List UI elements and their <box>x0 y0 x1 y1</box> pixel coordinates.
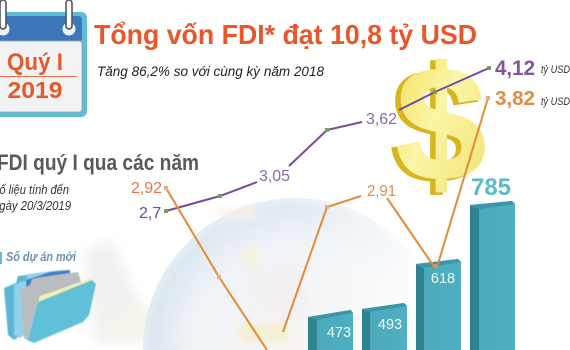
calendar text: year: 2019 <box>8 77 62 103</box>
purple label 3,62: 3,62 <box>366 111 397 128</box>
bar 618: 618 <box>431 271 455 287</box>
section heading: FDI quý I qua các năm <box>0 150 199 175</box>
calendar text: quarter: Quý I <box>7 49 63 76</box>
data note <box>0 182 71 213</box>
purple label 2,7: 2,7 <box>139 205 161 222</box>
bar 785 <box>470 174 515 350</box>
orange label 2,91: 2,91 <box>367 183 396 200</box>
bar 785: 785 <box>471 174 511 201</box>
orange label 3,82: 3,82 <box>495 88 535 110</box>
line chart: purple series <box>139 57 570 222</box>
blurred banknote background <box>85 240 160 342</box>
purple label 3,05: 3,05 <box>259 168 290 185</box>
bar 493: 493 <box>378 317 402 333</box>
bar 473 <box>308 310 353 350</box>
icon: dollar sign: $ <box>392 36 480 215</box>
icon: folders <box>4 270 96 343</box>
title: Tổng vốn FDI* đạt 10,8 tỷ USD <box>94 19 477 50</box>
bar 473: 473 <box>327 325 351 341</box>
purple label 4,12: 4,12 <box>495 57 535 80</box>
bar 618 <box>416 259 461 350</box>
bar 493 <box>362 303 407 350</box>
line chart: orange series <box>131 88 570 350</box>
orange label 2,92: 2,92 <box>131 180 162 197</box>
bar chart: new projects <box>308 174 515 350</box>
subtitle: Tăng 86,2% so với cùng kỳ năm 2018 <box>97 63 324 79</box>
legend: new projects: Số dự án mới <box>6 249 76 264</box>
globe background <box>140 195 460 350</box>
icon: dollar sign: $ <box>397 34 485 213</box>
calendar icon <box>0 0 87 117</box>
